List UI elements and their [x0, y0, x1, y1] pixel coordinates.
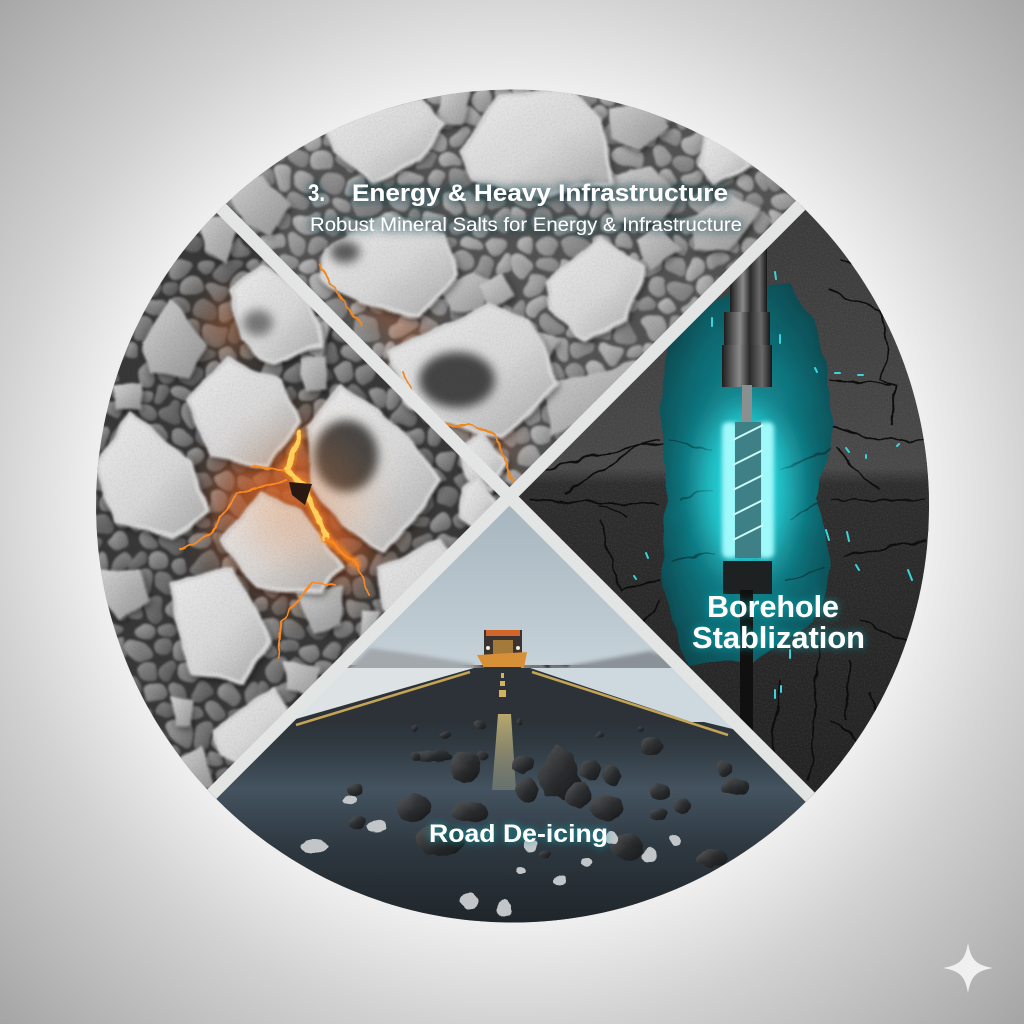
stone grain: [520, 212, 929, 790]
label: road de-icing: Road De-icing: [429, 820, 608, 848]
heading: Energy & Heavy Infrastructure: [352, 180, 728, 207]
icon: sparkle watermark: [943, 943, 993, 993]
sky: [350, 506, 662, 665]
subheading: Robust Mineral Salts for Energy & Infrastructure: [310, 215, 742, 236]
distant snowy hills: [348, 646, 672, 668]
rock cracks: [530, 260, 925, 790]
panel: right wedge borehole: [519, 206, 929, 798]
circular infographic: [96, 90, 929, 922]
dark mineral spot: [330, 241, 495, 408]
lava cracks: [180, 265, 512, 659]
black de-icing rocks: [347, 719, 749, 867]
label: borehole stabilization: Stablization: [692, 620, 865, 655]
wet foreground: [212, 722, 810, 922]
panel: top wedge salt rocks: [228, 90, 760, 490]
drill pipe: [722, 248, 772, 422]
dark mineral spot: [243, 310, 378, 492]
snow plough truck: [477, 630, 527, 670]
teal sparks: [634, 272, 912, 698]
heading: 3.: [308, 180, 325, 207]
warm lava tint: [348, 298, 518, 462]
panel: title block: [308, 180, 742, 236]
warm tint on rocks: [238, 440, 362, 560]
panel: left wedge salt rocks with lava: [97, 215, 512, 790]
road markings: [296, 672, 728, 790]
glowing helical bit: [722, 422, 774, 558]
label: borehole stabilization: Borehole: [707, 589, 839, 624]
panel: bottom wedge road: [212, 506, 810, 922]
snow fields: [296, 668, 474, 719]
lower drill housing: [723, 561, 772, 735]
wedge separators: [208, 201, 815, 802]
warm lava glow: [220, 435, 380, 585]
white salt granules: [300, 796, 681, 918]
center dark fissure: [289, 482, 312, 505]
teal stabilised resin: [660, 285, 832, 664]
asphalt road: [290, 668, 692, 725]
label: borehole stabilization: [692, 589, 865, 655]
panel: left and top salt rock base: [96, 90, 929, 922]
glow around bit: [702, 408, 790, 572]
texture grain on salt: [98, 90, 785, 772]
resin fractures: [668, 440, 830, 580]
